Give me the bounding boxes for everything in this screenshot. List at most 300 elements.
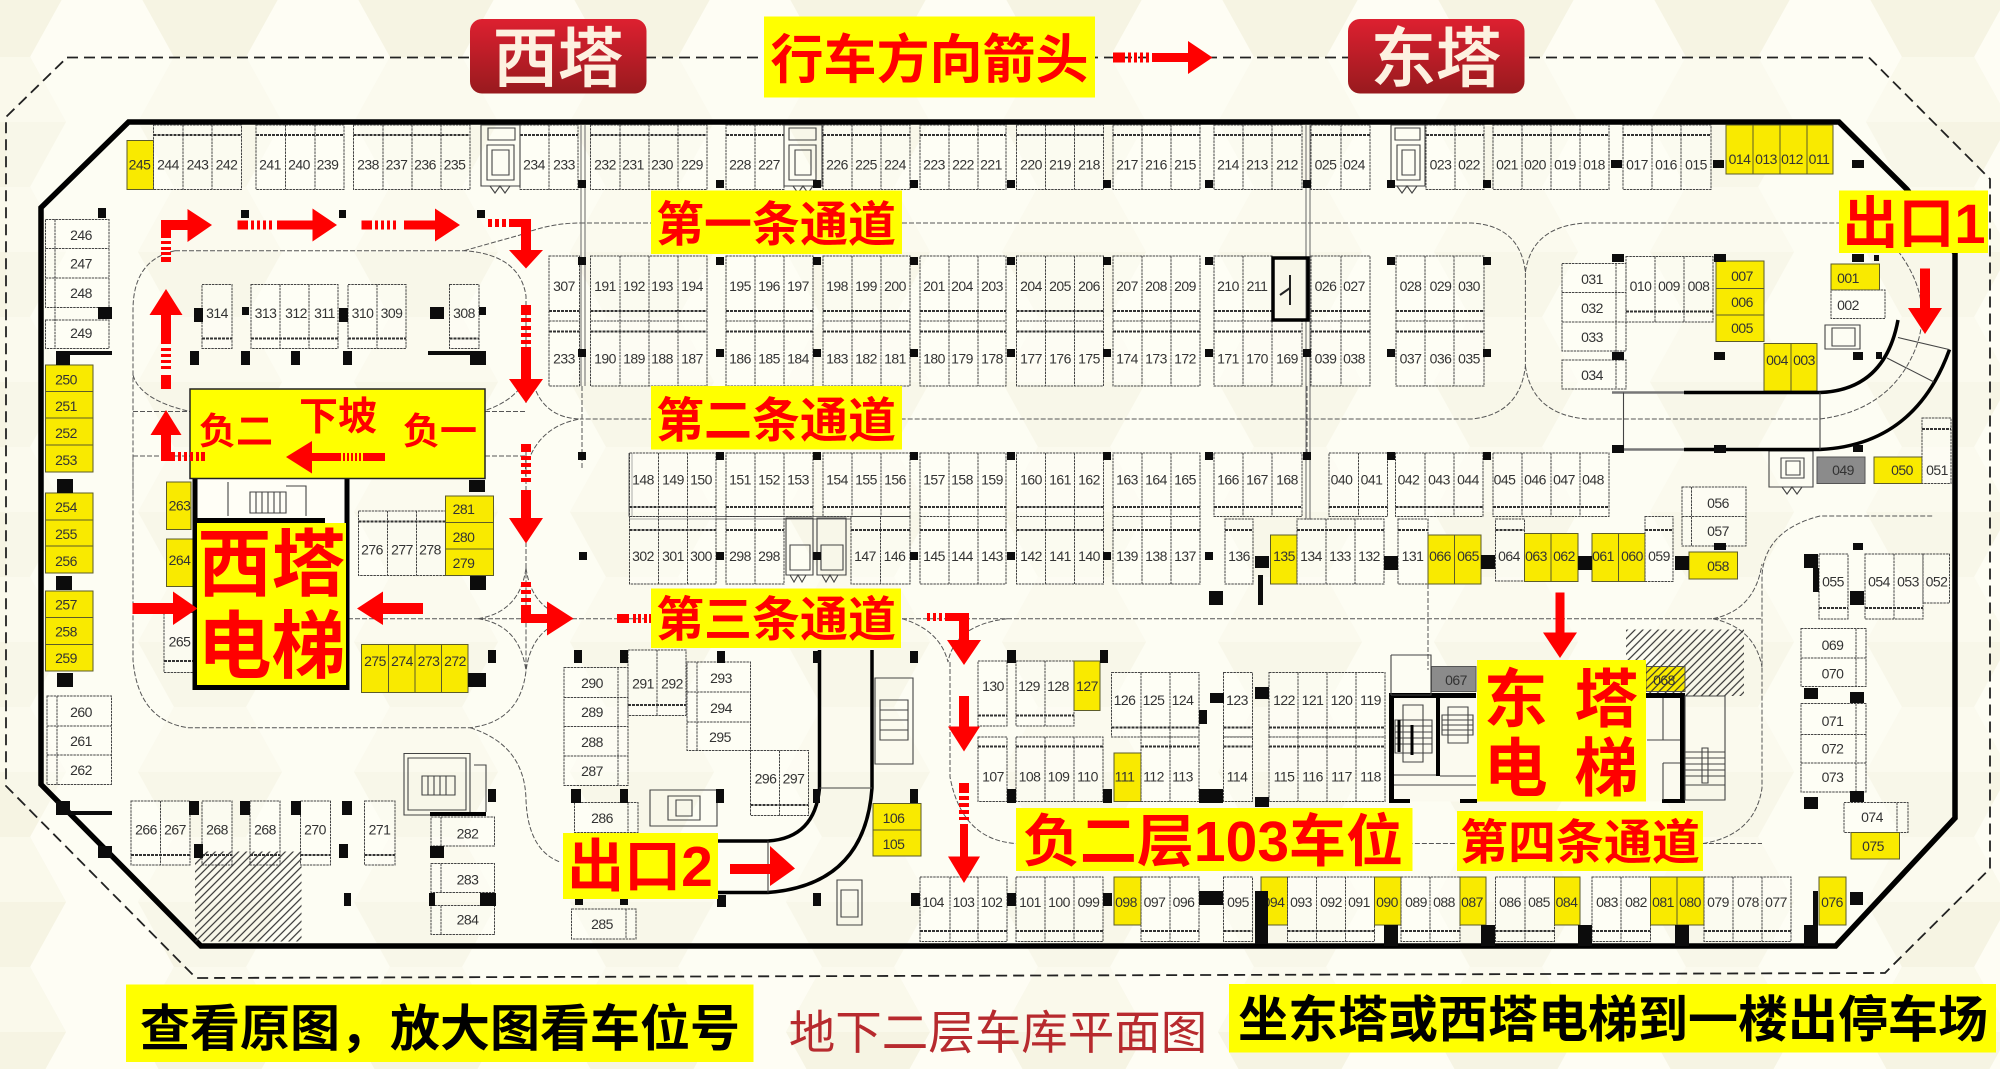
bays 023-022: 022 xyxy=(1458,156,1481,172)
bays 101-099: 100 xyxy=(1048,894,1071,910)
arrow: first lane right 2 xyxy=(362,208,460,242)
bay 114: 114 xyxy=(1227,768,1248,784)
arrow: first lane right 1 xyxy=(238,208,337,242)
yellow bays 007-005: 006 xyxy=(1731,294,1754,310)
bays 232-229 xyxy=(590,125,707,190)
yellow bays 081-080 xyxy=(1650,877,1704,925)
bays 115-118: 117 xyxy=(1331,768,1353,784)
bays 204-206 / 177-175: 176 xyxy=(1049,350,1072,366)
bays 293-295: 294 xyxy=(710,700,733,716)
bays 313-311 xyxy=(251,284,338,348)
bays 214-212 xyxy=(1214,125,1302,190)
grey bay 049: 049 xyxy=(1832,462,1855,478)
bays 026-027 / 039-038: 026 xyxy=(1315,278,1337,294)
bays 028-030 / 037-035: 030 xyxy=(1458,278,1481,294)
bays 157-159 / 145-143: 157 xyxy=(923,472,946,488)
bays 276-278 xyxy=(358,511,446,576)
driving lanes xyxy=(133,223,1934,862)
bays 071-073: 073 xyxy=(1822,769,1844,785)
yellow bays 066-065 xyxy=(1428,535,1481,584)
yellow bays 281-279: 280 xyxy=(453,529,475,545)
bays 104-102: 102 xyxy=(981,894,1003,910)
grey bay 049 xyxy=(1817,457,1865,484)
bay 314: 314 xyxy=(206,305,229,321)
yellow bays 281-279 xyxy=(446,496,494,576)
bays 232-229: 230 xyxy=(651,156,674,172)
bay 055: 055 xyxy=(1822,574,1845,590)
bays 210-211 / 171-169: 210 xyxy=(1217,278,1240,294)
bays 290-287: 287 xyxy=(581,763,604,779)
yellow bays 250-253: 251 xyxy=(55,398,78,414)
bays 093-091: 093 xyxy=(1290,894,1313,910)
bays 307 and 233: 233 xyxy=(553,350,576,366)
bay 286: 286 xyxy=(591,810,614,826)
bays 097-096: 096 xyxy=(1173,894,1195,910)
yellow bay 076: 076 xyxy=(1821,894,1844,910)
bays 232-229: 229 xyxy=(681,156,704,172)
bays 040-041: 041 xyxy=(1361,472,1383,488)
bay 095: 095 xyxy=(1227,894,1250,910)
bays 151-153 / 298-298: 153 xyxy=(787,472,810,488)
arrow: down to exit 1 xyxy=(1908,268,1942,334)
yellow bays 014-011 xyxy=(1726,125,1833,174)
bays 040-041 xyxy=(1329,453,1388,516)
bay 268 left: 268 xyxy=(206,822,229,838)
bays 163-165 / 139-137: 163 xyxy=(1116,472,1139,488)
bays 207-209 / 174-172: 174 xyxy=(1116,350,1139,366)
bays 210-211 / 171-169: 169 xyxy=(1276,350,1299,366)
note: take lift to first floor: 坐东塔或西塔电梯到一楼出停车场 xyxy=(1238,992,1988,1048)
arrow: third lane turning down xyxy=(927,613,981,665)
bays 238-235: 237 xyxy=(386,156,408,172)
bays 296-297: 296 xyxy=(755,770,777,786)
bays 293-295: 295 xyxy=(709,729,732,745)
yellow bay 090 xyxy=(1374,877,1401,925)
yellow bays 250-253: 252 xyxy=(55,425,78,441)
bays 220-218: 220 xyxy=(1020,156,1043,172)
bays 104-102: 104 xyxy=(922,894,945,910)
bays 028-030 / 037-035: 028 xyxy=(1400,278,1422,294)
yellow bays 257-259: 258 xyxy=(55,624,78,640)
bay 052: 052 xyxy=(1926,574,1948,590)
west tower core xyxy=(194,479,348,688)
bays 045-048: 045 xyxy=(1494,472,1516,488)
bays 195-197 / 186-184: 185 xyxy=(758,350,781,366)
bays 017-015: 016 xyxy=(1655,156,1678,172)
bay 271: 271 xyxy=(369,822,391,838)
bay 308 xyxy=(450,284,479,348)
bays 276-278: 276 xyxy=(361,542,384,558)
bays 115-118: 118 xyxy=(1360,768,1382,784)
bays 021-018: 021 xyxy=(1496,156,1519,172)
bays 207-209 / 174-172: 207 xyxy=(1116,278,1139,294)
bays 282-284: 282 xyxy=(457,826,479,842)
bays 238-235: 236 xyxy=(414,156,437,172)
bays 307 and 233 xyxy=(549,256,580,386)
bay 074: 074 xyxy=(1861,809,1884,825)
bays 204-206 / 177-175: 206 xyxy=(1078,278,1101,294)
bays 195-197 / 186-184: 195 xyxy=(729,278,752,294)
bays 195-197 / 186-184: 184 xyxy=(787,350,810,366)
bays 157-159 / 145-143: 159 xyxy=(981,472,1004,488)
bays 101-099: 099 xyxy=(1078,894,1100,910)
yellow bays 063-062: 062 xyxy=(1553,548,1576,564)
bays 163-165 / 139-137: 165 xyxy=(1174,472,1197,488)
bay 051: 051 xyxy=(1926,462,1949,478)
bays 228-227: 227 xyxy=(758,156,781,172)
bays 293-295 xyxy=(687,662,750,750)
bays 244-242: 243 xyxy=(187,156,209,172)
bays 234-233 xyxy=(520,125,578,190)
bays 201-203 / 180-178 xyxy=(920,256,1006,386)
bays 148-150 / 302-300: 149 xyxy=(662,472,685,488)
yellow bay 087: 087 xyxy=(1461,894,1484,910)
bay 308: 308 xyxy=(453,305,476,321)
bays 198-200 / 183-181: 182 xyxy=(855,350,878,366)
bays 108-110: 109 xyxy=(1048,768,1070,784)
bays 108-110: 108 xyxy=(1019,768,1041,784)
bays 086-085: 086 xyxy=(1499,894,1522,910)
bays 054-053: 054 xyxy=(1868,574,1891,590)
bays 045-048 xyxy=(1493,453,1609,516)
yellow bays 281-279: 279 xyxy=(453,555,475,571)
bay 265 xyxy=(164,612,193,672)
bays 296-297: 297 xyxy=(783,770,805,786)
bays 260-262 xyxy=(47,696,112,784)
bays 195-197 / 186-184 xyxy=(726,256,813,386)
row 148-048 xyxy=(630,453,1673,584)
bays 028-030 / 037-035 xyxy=(1396,256,1484,386)
bay 265: 265 xyxy=(169,634,191,650)
bays 025-024: 025 xyxy=(1315,156,1337,172)
bays 241-239: 240 xyxy=(288,156,311,172)
label: west tower lift: 电梯 xyxy=(198,605,346,688)
bays 157-159 / 145-143: 158 xyxy=(951,472,974,488)
bays 069-070: 069 xyxy=(1822,637,1844,653)
bays 126-124: 124 xyxy=(1172,692,1194,708)
bays 157-159 / 145-143: 143 xyxy=(981,548,1004,564)
bays 228-227 xyxy=(726,125,784,190)
bays 296-297 xyxy=(750,750,808,816)
bays 191-194 / 190-187: 188 xyxy=(651,350,674,366)
yellow bays 063-062: 063 xyxy=(1525,548,1548,564)
west wing parking xyxy=(46,220,494,942)
label: ramp down box xyxy=(190,389,485,478)
bays 198-200 / 183-181: 199 xyxy=(855,278,878,294)
bays 160-162 / 142-140: 142 xyxy=(1020,548,1043,564)
yellow bays 007-005 xyxy=(1716,261,1764,342)
bay 286 xyxy=(574,802,638,832)
bays 148-150 / 302-300 xyxy=(630,453,716,584)
bays 025-024 xyxy=(1311,125,1370,190)
yellow bay 087 xyxy=(1460,877,1486,925)
yellow bays 081-080: 081 xyxy=(1652,894,1675,910)
bays 276-278: 277 xyxy=(391,542,414,558)
bays 226-224: 226 xyxy=(826,156,849,172)
bays 054-053: 053 xyxy=(1897,574,1920,590)
yellow bay 075 xyxy=(1851,832,1900,859)
bays 115-118 xyxy=(1269,737,1385,802)
bays 126-124 xyxy=(1112,672,1199,737)
bay 052 xyxy=(1923,554,1950,603)
bays 101-099: 101 xyxy=(1019,894,1042,910)
bays 313-311: 311 xyxy=(314,305,336,321)
central-south parking xyxy=(978,661,1476,802)
bays 290-287: 288 xyxy=(581,734,604,750)
bays 232-229: 232 xyxy=(594,156,617,172)
arrow: down to east tower xyxy=(1543,592,1577,658)
bays 246-249: 248 xyxy=(70,285,93,301)
bays 093-091: 091 xyxy=(1348,894,1371,910)
bays 122-119: 121 xyxy=(1302,692,1324,708)
yellow bays 250-253: 253 xyxy=(55,452,78,468)
bays 214-212: 212 xyxy=(1276,156,1299,172)
yellow bay 075: 075 xyxy=(1862,838,1885,854)
bays 223-221: 222 xyxy=(952,156,975,172)
note: zoom to view bay numbers xyxy=(126,984,754,1062)
bays 071-073 xyxy=(1801,704,1866,792)
bays 228-227: 228 xyxy=(729,156,752,172)
hatched zone east with bay 068: 068 xyxy=(1653,672,1676,688)
bay 285: 285 xyxy=(591,916,614,932)
bays 028-030 / 037-035: 036 xyxy=(1430,350,1452,366)
bays 026-027 / 039-038: 038 xyxy=(1343,350,1366,366)
bays 166-168: 166 xyxy=(1217,472,1240,488)
bays 157-159 / 145-143: 144 xyxy=(951,548,974,564)
central-west parking xyxy=(564,650,921,939)
bays 201-203 / 180-178: 203 xyxy=(981,278,1004,294)
bays 260-262: 261 xyxy=(70,733,93,749)
bays 293-295: 293 xyxy=(710,670,733,686)
bays 042-044: 042 xyxy=(1398,472,1420,488)
bays 040-041: 040 xyxy=(1331,472,1353,488)
bays 198-200 / 183-181: 181 xyxy=(884,350,907,366)
bay 074 xyxy=(1844,802,1908,832)
bays 191-194 / 190-187: 187 xyxy=(681,350,704,366)
yellow bays 254-256: 255 xyxy=(55,526,78,542)
bay 136: 136 xyxy=(1228,548,1251,564)
bays 290-287: 290 xyxy=(581,675,604,691)
bays 163-165 / 139-137: 139 xyxy=(1116,548,1139,564)
bays 191-194 / 190-187: 189 xyxy=(623,350,646,366)
bays 223-221: 221 xyxy=(980,156,1003,172)
bay 130: 130 xyxy=(982,678,1005,694)
bays 191-194 / 190-187: 194 xyxy=(681,278,704,294)
bays 207-209 / 174-172 xyxy=(1113,256,1200,386)
arrow: down to third lane xyxy=(509,444,543,544)
structural columns xyxy=(56,160,1882,946)
yellow bays 281-279: 281 xyxy=(453,501,475,517)
bay 270 xyxy=(300,801,330,865)
bays 083-082: 082 xyxy=(1625,894,1648,910)
bays 204-206 / 177-175: 204 xyxy=(1020,278,1043,294)
yellow bays 014-011: 012 xyxy=(1781,151,1804,167)
bays 126-124: 126 xyxy=(1114,692,1136,708)
bays 163-165 / 139-137: 138 xyxy=(1145,548,1168,564)
note: zoom to view bay numbers: 查看原图，放大图看车位号 xyxy=(140,1001,740,1057)
bays 191-194 / 190-187 xyxy=(590,256,707,386)
bays 028-030 / 037-035: 029 xyxy=(1430,278,1452,294)
yellow bays 254-256: 254 xyxy=(55,499,78,515)
bays 129-128: 128 xyxy=(1047,678,1070,694)
yellow bays 007-005: 007 xyxy=(1731,268,1754,284)
bays 282-284: 284 xyxy=(457,912,479,928)
bays 198-200 / 183-181: 200 xyxy=(884,278,907,294)
bays 166-168: 168 xyxy=(1276,472,1299,488)
bays 244-242: 244 xyxy=(157,156,180,172)
bays 198-200 / 183-181: 198 xyxy=(826,278,849,294)
bays 154-156 / 147-146: 156 xyxy=(884,472,907,488)
bays 191-194 / 190-187: 190 xyxy=(594,350,617,366)
bay 059: 059 xyxy=(1648,548,1671,564)
bays 017-015 xyxy=(1623,125,1711,190)
bay 131: 131 xyxy=(1402,548,1424,564)
yellow bay 001: 001 xyxy=(1837,270,1860,286)
bays 071-073: 071 xyxy=(1822,713,1844,729)
bays 166-168 xyxy=(1214,453,1302,516)
bays 238-235: 238 xyxy=(357,156,380,172)
bays 148-150 / 302-300: 302 xyxy=(632,548,655,564)
bay 059 xyxy=(1645,516,1673,582)
bays 201-203 / 180-178: 178 xyxy=(981,350,1004,366)
yellow bays 275-272: 272 xyxy=(444,653,467,669)
bays 031-034: 033 xyxy=(1581,329,1604,345)
yellow bays 007-005: 005 xyxy=(1731,320,1754,336)
bays 045-048: 046 xyxy=(1524,472,1547,488)
bays 217-215: 217 xyxy=(1116,156,1139,172)
bays 154-156 / 147-146: 154 xyxy=(826,472,849,488)
bays 160-162 / 142-140: 162 xyxy=(1078,472,1101,488)
bay 268 right: 268 xyxy=(254,822,277,838)
bays 226-224: 225 xyxy=(855,156,878,172)
bays 042-044: 044 xyxy=(1457,472,1480,488)
yellow bay 264 xyxy=(166,539,193,586)
bays 201-203 / 180-178: 180 xyxy=(923,350,946,366)
yellow bay 263 xyxy=(166,482,191,530)
yellow bay 084: 084 xyxy=(1556,894,1578,910)
bays 010-008: 010 xyxy=(1630,278,1652,294)
label: lane 2: 第二条通道 xyxy=(656,395,896,448)
bays 056-057: 057 xyxy=(1707,523,1730,539)
bays 031-034 xyxy=(1562,264,1626,389)
yellow bay 084 xyxy=(1554,877,1580,925)
bays 204-206 / 177-175: 177 xyxy=(1020,350,1043,366)
bays 122-119 xyxy=(1269,672,1385,737)
bays 291-292: 291 xyxy=(632,676,655,692)
driving-direction arrows xyxy=(132,208,1942,886)
top row parking xyxy=(127,125,1833,190)
label: east tower lift: 电 梯 xyxy=(1484,733,1638,805)
bays 160-162 / 142-140: 141 xyxy=(1049,548,1072,564)
yellow bays 257-259: 257 xyxy=(55,596,78,612)
bays 210-211 / 171-169: 211 xyxy=(1247,278,1268,294)
bays 244-242: 242 xyxy=(216,156,238,172)
yellow bay 098 xyxy=(1114,877,1141,925)
double rows 191-030 and 190-035 xyxy=(549,256,1484,386)
bays 025-024: 024 xyxy=(1343,156,1366,172)
bay 114 xyxy=(1224,737,1252,802)
bays 151-153 / 298-298: 152 xyxy=(758,472,781,488)
bays 112-113 xyxy=(1141,737,1199,802)
bays 148-150 / 302-300: 148 xyxy=(632,472,655,488)
bays 241-239: 241 xyxy=(259,156,282,172)
bays 160-162 / 142-140 xyxy=(1016,453,1104,584)
yellow bays 106-105 xyxy=(873,804,921,856)
yellow bay 111: 111 xyxy=(1115,768,1135,784)
bays 226-224 xyxy=(823,125,910,190)
bays 191-194 / 190-187: 192 xyxy=(623,278,646,294)
bays 112-113: 112 xyxy=(1143,768,1165,784)
bays 071-073: 072 xyxy=(1822,740,1844,756)
bays 204-206 / 177-175: 175 xyxy=(1078,350,1101,366)
yellow bay 001 xyxy=(1831,264,1880,290)
bays 010-008 xyxy=(1626,256,1713,322)
bays 166-168: 167 xyxy=(1246,472,1269,488)
bays 083-082: 083 xyxy=(1596,894,1619,910)
hatched zone east with bay 068 xyxy=(1626,630,1744,696)
bays 026-027 / 039-038: 039 xyxy=(1315,350,1337,366)
arrow: up out of ramp to west aisle xyxy=(150,410,205,461)
bays 093-091 xyxy=(1288,877,1374,942)
label: ramp down box: 负一 xyxy=(403,411,477,452)
bays 226-224: 224 xyxy=(884,156,907,172)
bays 151-153 / 298-298 xyxy=(726,453,813,584)
bays 220-218: 218 xyxy=(1078,156,1101,172)
bays 291-292 xyxy=(628,650,686,716)
label: lane 1: 第一条通道 xyxy=(656,199,896,252)
bays 220-218 xyxy=(1016,125,1104,190)
bays 260-262: 262 xyxy=(70,762,93,778)
bays 101-099 xyxy=(1016,877,1103,942)
bays 290-287 xyxy=(564,668,628,786)
yellow bay 245 xyxy=(127,140,154,190)
arrow: top-left corner turning right xyxy=(161,209,212,262)
bay 270: 270 xyxy=(304,822,327,838)
bays 042-044 xyxy=(1396,453,1483,516)
bays 021-018: 019 xyxy=(1554,156,1577,172)
bays 122-119: 119 xyxy=(1360,692,1382,708)
bay 051 xyxy=(1922,418,1951,484)
arrow: down to second lane xyxy=(509,305,543,403)
yellow bay 076 xyxy=(1819,877,1846,925)
icon: stairwell centre xyxy=(1273,258,1308,320)
bays 089-088: 088 xyxy=(1433,894,1456,910)
bays 310-309 xyxy=(348,284,406,348)
yellow bays 066-065: 065 xyxy=(1457,548,1480,564)
bays 031-034: 031 xyxy=(1581,271,1604,287)
bays 086-085 xyxy=(1496,877,1554,942)
bays 210-211 / 171-169 xyxy=(1214,256,1302,386)
arrow: fourth aisle down 2 xyxy=(948,783,980,883)
east tower core xyxy=(1389,655,1725,803)
arrow: turning right into third lane xyxy=(521,582,574,636)
yellow bays 257-259: 259 xyxy=(55,650,78,666)
bays 241-239 xyxy=(256,125,344,190)
bays 021-018 xyxy=(1493,125,1609,190)
yellow bays 081-080: 080 xyxy=(1679,894,1702,910)
bay 130 xyxy=(978,661,1007,726)
bays 021-018: 020 xyxy=(1524,156,1547,172)
bay 271 xyxy=(364,801,395,865)
bays 151-153 / 298-298: 298 xyxy=(758,548,781,564)
south-west stairwell xyxy=(404,754,486,815)
yellow bay 135 xyxy=(1270,535,1297,584)
bays 129-128 xyxy=(1016,661,1074,726)
bays 129-128: 129 xyxy=(1018,678,1041,694)
bays 232-229: 231 xyxy=(622,156,645,172)
bays 134-132: 133 xyxy=(1329,548,1352,564)
bays 115-118: 115 xyxy=(1274,768,1295,784)
